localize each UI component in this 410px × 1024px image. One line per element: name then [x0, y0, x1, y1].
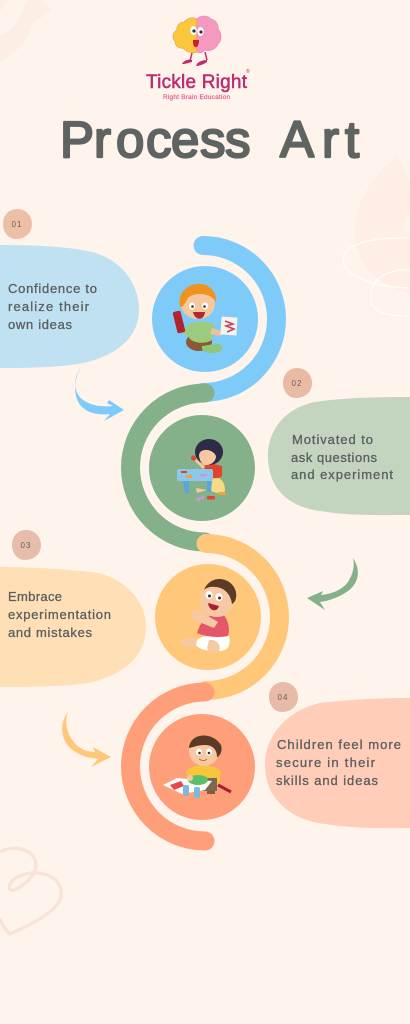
- logo: [146, 16, 250, 101]
- logo registered mark: ®: [246, 68, 250, 75]
- connector arcs: [130, 246, 280, 841]
- panel: item 03: [0, 530, 146, 767]
- text: item 01: realize their: [8, 299, 90, 314]
- arrow: green: [307, 558, 358, 610]
- logo wordmark: Tickle Right: [146, 72, 248, 93]
- badge 02: 02: [292, 379, 302, 388]
- text: item 03: and mistakes: [8, 625, 92, 640]
- arc: yellow: [206, 544, 280, 690]
- arrow: yellow: [62, 712, 111, 767]
- circle: child with table: [149, 415, 255, 521]
- panel: item 02: [268, 368, 410, 610]
- circle: child with crayon: [152, 266, 258, 372]
- arrow: blue: [75, 367, 124, 421]
- text: item 01: own ideas: [8, 317, 72, 332]
- blob: blue: [0, 245, 139, 368]
- text: item 01: [8, 281, 97, 332]
- blob: orange: [265, 698, 410, 828]
- text: item 02: and experiment: [291, 467, 393, 482]
- circle: child painting: [149, 714, 255, 820]
- blob: green: [268, 397, 410, 515]
- text: item 04: Children feel more: [277, 737, 401, 752]
- background decoration: heart scribble: [0, 848, 61, 934]
- text: item 03: Embrace: [8, 589, 62, 604]
- text: item 04: secure in their: [276, 755, 376, 770]
- badge 03: [12, 530, 41, 560]
- text: item 03: [8, 589, 111, 640]
- text: item 03: experimentation: [8, 607, 111, 622]
- background decoration: right blob with loops: [343, 157, 410, 316]
- panel: item 04: [265, 682, 410, 828]
- badge 04: [269, 682, 298, 712]
- text: item 04: skills and ideas: [276, 773, 378, 788]
- circle: clapping baby: [155, 564, 261, 670]
- arc: green: [130, 393, 205, 542]
- badge 02: [283, 368, 312, 398]
- text: item 04: [276, 737, 401, 788]
- badge 04: 04: [278, 693, 288, 702]
- arc: orange: [130, 692, 205, 841]
- logo tagline: Right Brain Education: [163, 94, 230, 101]
- badge 01: [3, 209, 32, 239]
- badge 01: 01: [12, 220, 22, 229]
- illustration: boy with crayon and drawing: [172, 284, 238, 353]
- text: item 02: [291, 432, 393, 482]
- blob: yellow: [0, 567, 146, 687]
- title: Process Art: [60, 111, 359, 168]
- illustration: baby in diaper clapping: [181, 579, 236, 653]
- background decoration: top-left swirl: [0, 0, 52, 62]
- panel: item 01: [0, 209, 139, 421]
- illustration: girl at play table: [177, 439, 226, 501]
- illustration: boy painting on paper: [163, 736, 231, 798]
- text: item 02: ask questions: [291, 450, 378, 465]
- text: item 01: Confidence to: [8, 281, 97, 296]
- icon: brain mascot: [173, 16, 221, 66]
- arc: blue: [203, 246, 276, 392]
- badge 03: 03: [21, 541, 31, 550]
- text: item 02: Motivated to: [292, 432, 373, 447]
